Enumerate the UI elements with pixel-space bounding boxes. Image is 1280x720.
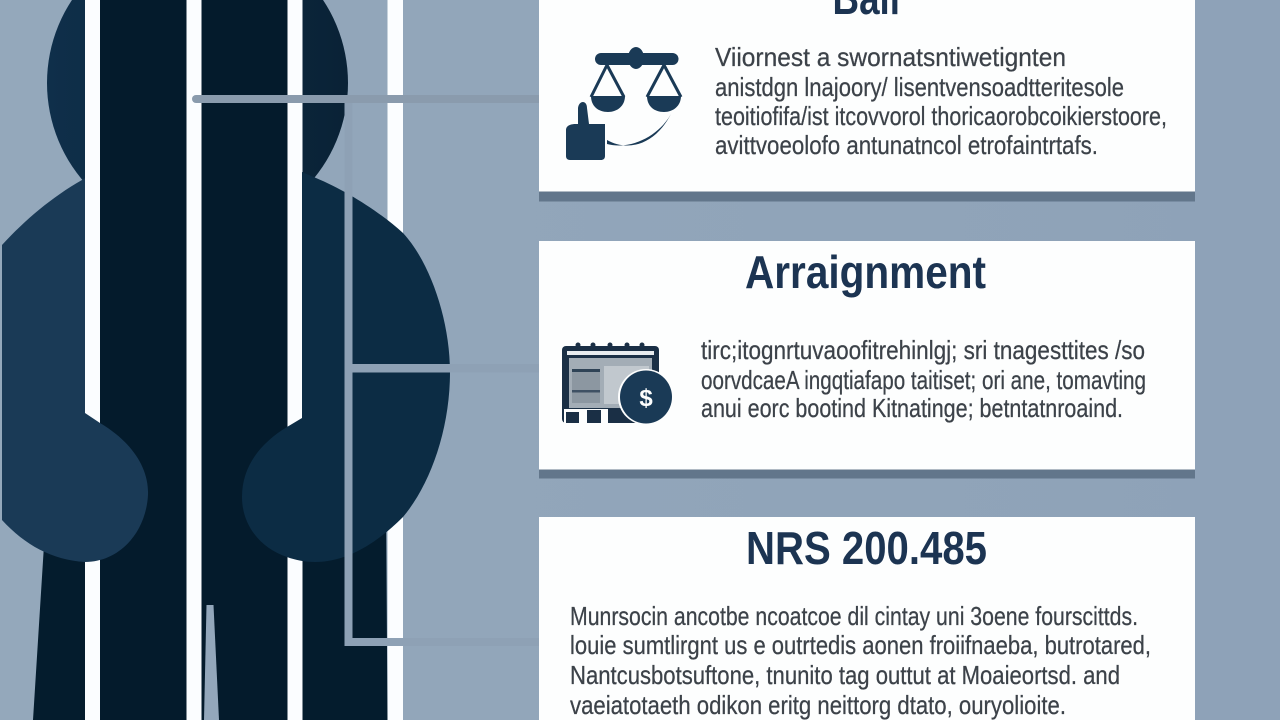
- icon: calendar and coin: $: [639, 385, 653, 412]
- gap between legs: [204, 605, 219, 720]
- dark shaded panel: left of centre: [100, 0, 186, 720]
- body text: NRS 200.485: louie sumtlirgnt us e outrtedis aonen froiifnaeba, butrotared,: [570, 630, 1151, 660]
- connector to NRS 200.485: [344, 638, 540, 646]
- prison bar: third: [288, 0, 302, 720]
- body text: NRS 200.485: Munrsocin ancotbe ncoatcoe dil cintay uni 3oene fourscittds.: [570, 601, 1138, 631]
- heading: NRS 200.485: NRS 200.485: [746, 522, 987, 574]
- prison bar: second: [186, 0, 202, 720]
- prison bar: first: [85, 0, 100, 720]
- body text: Bail: teoitiofifa/ist itcovvorol thoricaorobcoikierstoore,: [715, 101, 1167, 131]
- card background: [539, 241, 1195, 470]
- body text: Arraignment: anui eorc bootind Kitnatinge; betntatnroaind.: [701, 393, 1123, 423]
- body text: Arraignment: [701, 335, 1146, 423]
- body text: NRS 200.485: [570, 601, 1151, 720]
- figure head: [47, 0, 348, 234]
- heading: Arraignment: Arraignment: [745, 246, 986, 298]
- prison bar: far right: [388, 0, 403, 720]
- panel: Bail: [539, 0, 1195, 202]
- right shoulder and arm: [242, 172, 450, 562]
- card background: [539, 517, 1195, 720]
- connector to Bail: [192, 95, 539, 103]
- body text: Arraignment: tirc;itognrtuvaoofitrehinlgj; sri tnagesttites /so: [701, 335, 1145, 365]
- figure behind prison bars: [2, 0, 450, 720]
- vertical connector: [344, 103, 352, 646]
- dark shaded panel: right of centre: [202, 0, 288, 720]
- connector lines: [192, 95, 540, 646]
- panel: Arraignment: [539, 241, 1195, 478]
- left shoulder and arm: [2, 178, 148, 562]
- body text: Bail: anistdgn lnajoory/ lisentvensoadtteritesole: [715, 72, 1124, 102]
- panel: NRS 200.485: [539, 517, 1195, 720]
- body text: Bail: [715, 42, 1167, 160]
- body text: Bail: avittvoeolofo antunatncol etrofaintrtafs.: [715, 130, 1098, 160]
- body text: Bail: Viiornest a swornatsntiwetignten: [715, 42, 1066, 72]
- body text: Arraignment: oorvdcaeA ingqtiafapo taitiset; ori ane, tomavting: [701, 365, 1146, 395]
- icon: calendar and coin: [562, 342, 674, 425]
- icon: scales and thumbs up: [566, 47, 681, 160]
- body text: NRS 200.485: Nantcusbotsuftone, tnunito tag outtut at Moaieortsd. and: [570, 660, 1120, 690]
- card background: [539, 0, 1195, 192]
- body text: NRS 200.485: vaeiatotaeth odikon eritg neittorg dtato, ouryolioite.: [570, 690, 1066, 720]
- figure legs: [33, 500, 388, 720]
- card shadow: [539, 462, 1195, 478]
- card shadow: [539, 185, 1195, 202]
- connector to Arraignment: [344, 364, 540, 372]
